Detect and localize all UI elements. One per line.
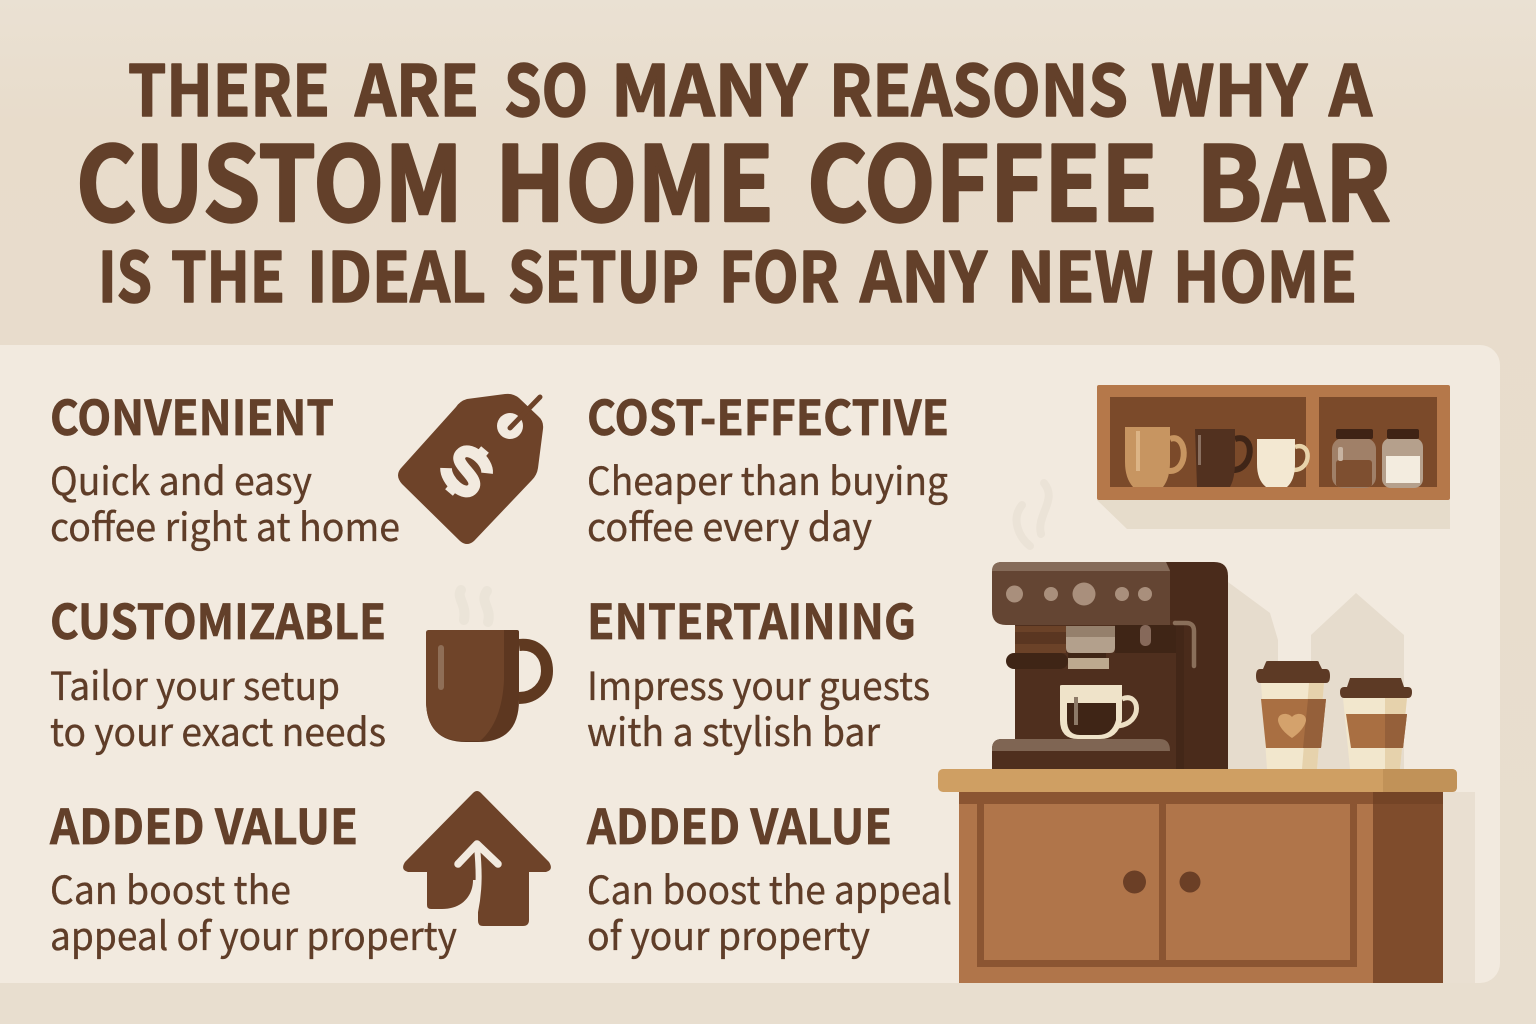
reason: added value left bbox=[49, 788, 457, 962]
reason: convenient: CONVENIENT bbox=[50, 379, 334, 449]
illustration: wall shelf bbox=[1097, 385, 1450, 529]
icon: house with arrow bbox=[403, 791, 551, 926]
steam above machine bbox=[1017, 483, 1049, 546]
title: ARE bbox=[354, 36, 479, 137]
reason: customizable bbox=[50, 583, 386, 758]
title: ANY bbox=[859, 222, 988, 322]
reason: entertaining: ENTERTAINING bbox=[587, 583, 916, 653]
espresso cup bbox=[1060, 685, 1136, 739]
illustration: cabinet bbox=[959, 792, 1443, 983]
icon: price tag bbox=[398, 394, 543, 544]
illustration: takeaway cup large bbox=[1256, 661, 1330, 769]
reason: cost-effective: coffee every day bbox=[587, 497, 872, 553]
jar: milk bbox=[1382, 429, 1423, 488]
reason: cost-effective bbox=[587, 379, 949, 553]
reason: added value left: appeal of your property bbox=[50, 906, 457, 962]
title: THERE bbox=[128, 36, 330, 137]
title: A bbox=[1328, 36, 1373, 137]
jar: coffee bbox=[1332, 429, 1376, 488]
title: IS bbox=[98, 222, 152, 322]
reason: convenient: Quick and easy bbox=[50, 451, 312, 507]
wall shadows bbox=[1228, 582, 1475, 983]
reason: entertaining bbox=[587, 583, 930, 758]
reason: customizable: CUSTOMIZABLE bbox=[50, 583, 386, 653]
mug: cream bbox=[1257, 439, 1308, 487]
reason: added value right: ADDED VALUE bbox=[586, 788, 892, 858]
reason: customizable: to your exact needs bbox=[50, 702, 386, 758]
mug: tan bbox=[1125, 427, 1184, 487]
panel: reasons bbox=[0, 345, 1500, 983]
reason: entertaining: Impress your guests bbox=[587, 656, 930, 712]
reason: customizable: Tailor your setup bbox=[50, 656, 340, 712]
title: SETUP bbox=[508, 222, 699, 322]
title: BAR bbox=[1196, 102, 1391, 251]
title: IDEAL bbox=[307, 222, 486, 322]
illustration: espresso machine bbox=[992, 562, 1228, 769]
title bbox=[76, 36, 1391, 322]
reason: added value right: Can boost the appeal bbox=[587, 860, 952, 916]
reason: entertaining: with a stylish bar bbox=[587, 702, 881, 758]
icon: coffee mug bbox=[426, 590, 547, 742]
title: HOME bbox=[495, 102, 774, 251]
title: REASONS bbox=[829, 36, 1128, 137]
reason: cost-effective: Cheaper than buying bbox=[587, 451, 948, 507]
title: FOR bbox=[719, 222, 839, 322]
illustration: countertop bbox=[938, 769, 1457, 792]
drip tray bbox=[992, 739, 1170, 769]
cabinet knobs bbox=[1123, 870, 1200, 894]
reason: convenient bbox=[50, 379, 400, 553]
title: HOME bbox=[1173, 222, 1357, 322]
reason: cost-effective: COST-EFFECTIVE bbox=[587, 379, 949, 449]
title: CUSTOM bbox=[76, 102, 463, 251]
group head and portafilter bbox=[1006, 626, 1115, 669]
title: NEW bbox=[1007, 222, 1153, 322]
mug: dark bbox=[1195, 429, 1250, 487]
machine head with knobs bbox=[992, 562, 1170, 625]
reason: added value left: ADDED VALUE bbox=[49, 788, 358, 858]
reason: added value right bbox=[586, 788, 952, 962]
title: THE bbox=[171, 222, 285, 322]
title: SO bbox=[504, 36, 588, 137]
illustration: takeaway cup small bbox=[1340, 678, 1412, 769]
title: COFFEE bbox=[807, 102, 1158, 251]
reason: added value right: of your property bbox=[587, 906, 870, 962]
title: MANY bbox=[611, 36, 808, 137]
cabinet door frame bbox=[977, 804, 1357, 967]
reason: convenient: coffee right at home bbox=[50, 497, 400, 553]
title: WHY bbox=[1151, 36, 1308, 137]
reason: added value left: Can boost the bbox=[50, 860, 291, 916]
